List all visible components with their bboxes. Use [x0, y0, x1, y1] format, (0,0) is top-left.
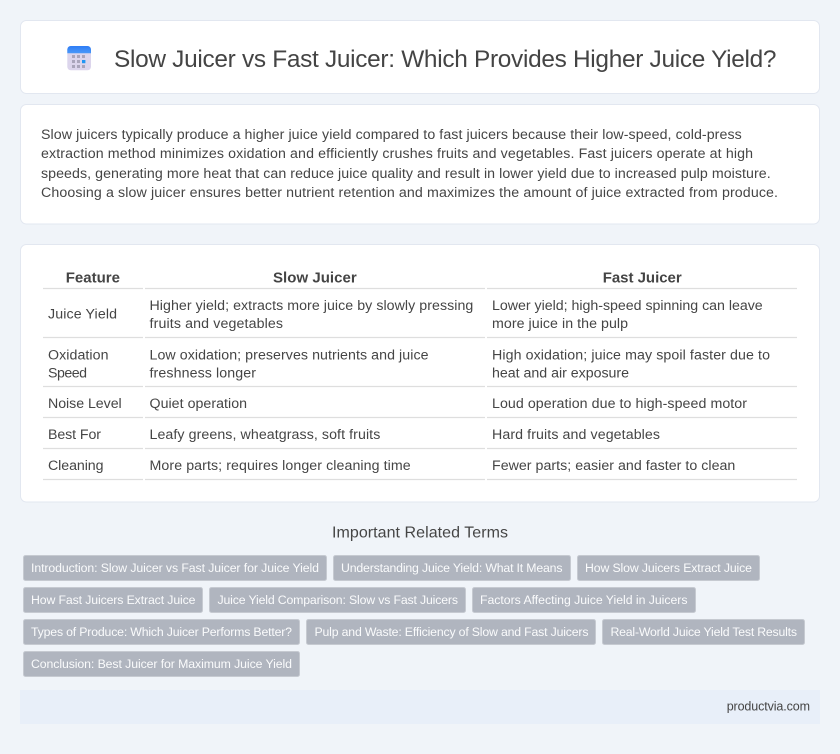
panel: related term chips: How Fast Juicers Extract Juice — [31, 593, 196, 607]
table header: Slow Juicer — [273, 270, 357, 287]
table row: juice yield: more juice in the pulp — [492, 316, 628, 332]
table row: noise level — [48, 396, 747, 412]
table row: best for — [48, 427, 660, 443]
table header: Feature — [66, 270, 120, 287]
panel: title header — [20, 20, 820, 94]
table header — [66, 270, 682, 287]
icon: calendar — [67, 46, 91, 70]
panel: related term chips: Factors Affecting Juice Yield in Juicers — [480, 593, 688, 607]
footer: productvia.com — [727, 700, 810, 714]
table row: best for: Best For — [48, 427, 101, 443]
panel: related term chips: Understanding Juice Yield: What It Means — [341, 561, 562, 575]
panel: related term chips — [24, 556, 804, 676]
table row: cleaning: Cleaning — [48, 458, 104, 474]
table row: noise level: Noise Level — [48, 396, 122, 412]
panel: related term chips: Conclusion: Best Juicer for Maximum Juice Yield — [31, 657, 292, 671]
table row: juice yield: Juice Yield — [48, 307, 117, 323]
table row: best for: Hard fruits and vegetables — [492, 427, 660, 443]
panel: related term chips: Real-World Juice Yield Test Results — [610, 625, 797, 639]
panel: related term chips: Introduction: Slow Juicer vs Fast Juicer for Juice Yield — [31, 561, 319, 575]
table row: oxidation speed: High oxidation; juice may spoil faster due to — [492, 347, 770, 363]
table row: cleaning: Fewer parts; easier and faster to clean — [492, 458, 735, 474]
table row: best for: Leafy greens, wheatgrass, soft fruits — [150, 427, 380, 443]
table row: juice yield — [48, 298, 763, 332]
text block: introduction paragraph: extraction method minimizes oxidation and efficiently crushes fruits and vegetables. Fast juicers operate at high — [41, 146, 753, 162]
table row: noise level: Quiet operation — [150, 396, 247, 412]
panel: related term chips: How Slow Juicers Extract Juice — [585, 561, 752, 575]
table row: juice yield: fruits and vegetables — [150, 316, 283, 332]
panel: related term chips: Types of Produce: Which Juicer Performs Better? — [31, 625, 292, 639]
table row: oxidation speed: freshness longer — [150, 365, 256, 381]
table row: noise level: Loud operation due to high-speed motor — [492, 396, 747, 412]
text block: introduction paragraph: Choosing a slow juicer ensures better nutrient retention and maximizes the amount of juice extracted from produce. — [41, 185, 778, 201]
panel: related term chips: Juice Yield Comparison: Slow vs Fast Juicers — [218, 593, 458, 607]
table row: oxidation speed — [48, 347, 770, 381]
text block: introduction paragraph: Slow juicers typically produce a higher juice yield compared to fast juicers because their low-speed, cold-press — [41, 127, 742, 143]
table row: oxidation speed: Oxidation — [48, 347, 108, 363]
text block: introduction paragraph — [41, 127, 778, 201]
title: Slow Juicer vs Fast Juicer: Which Provides Higher Juice Yield? — [114, 46, 776, 73]
table row: oxidation speed: Low oxidation; preserves nutrients and juice — [150, 347, 429, 363]
table header: Fast Juicer — [603, 270, 682, 287]
panel: introduction — [20, 104, 820, 224]
heading: related terms: Important Related Terms — [332, 524, 508, 542]
panel: comparison table — [20, 244, 820, 502]
table row: cleaning — [48, 458, 735, 474]
panel: related term chips: Pulp and Waste: Efficiency of Slow and Fast Juicers — [314, 625, 588, 639]
table row: cleaning: More parts; requires longer cleaning time — [150, 458, 411, 474]
table row: oxidation speed: Speed — [48, 365, 87, 381]
footer — [20, 690, 820, 724]
table row: oxidation speed: heat and air exposure — [492, 365, 629, 381]
text block: introduction paragraph: speeds, generating more heat that can reduce juice quality and result in lower yield due to increased pulp moisture. — [41, 166, 771, 182]
table row: juice yield: Lower yield; high-speed spinning can leave — [492, 298, 763, 314]
table row: juice yield: Higher yield; extracts more juice by slowly pressing — [150, 298, 473, 314]
